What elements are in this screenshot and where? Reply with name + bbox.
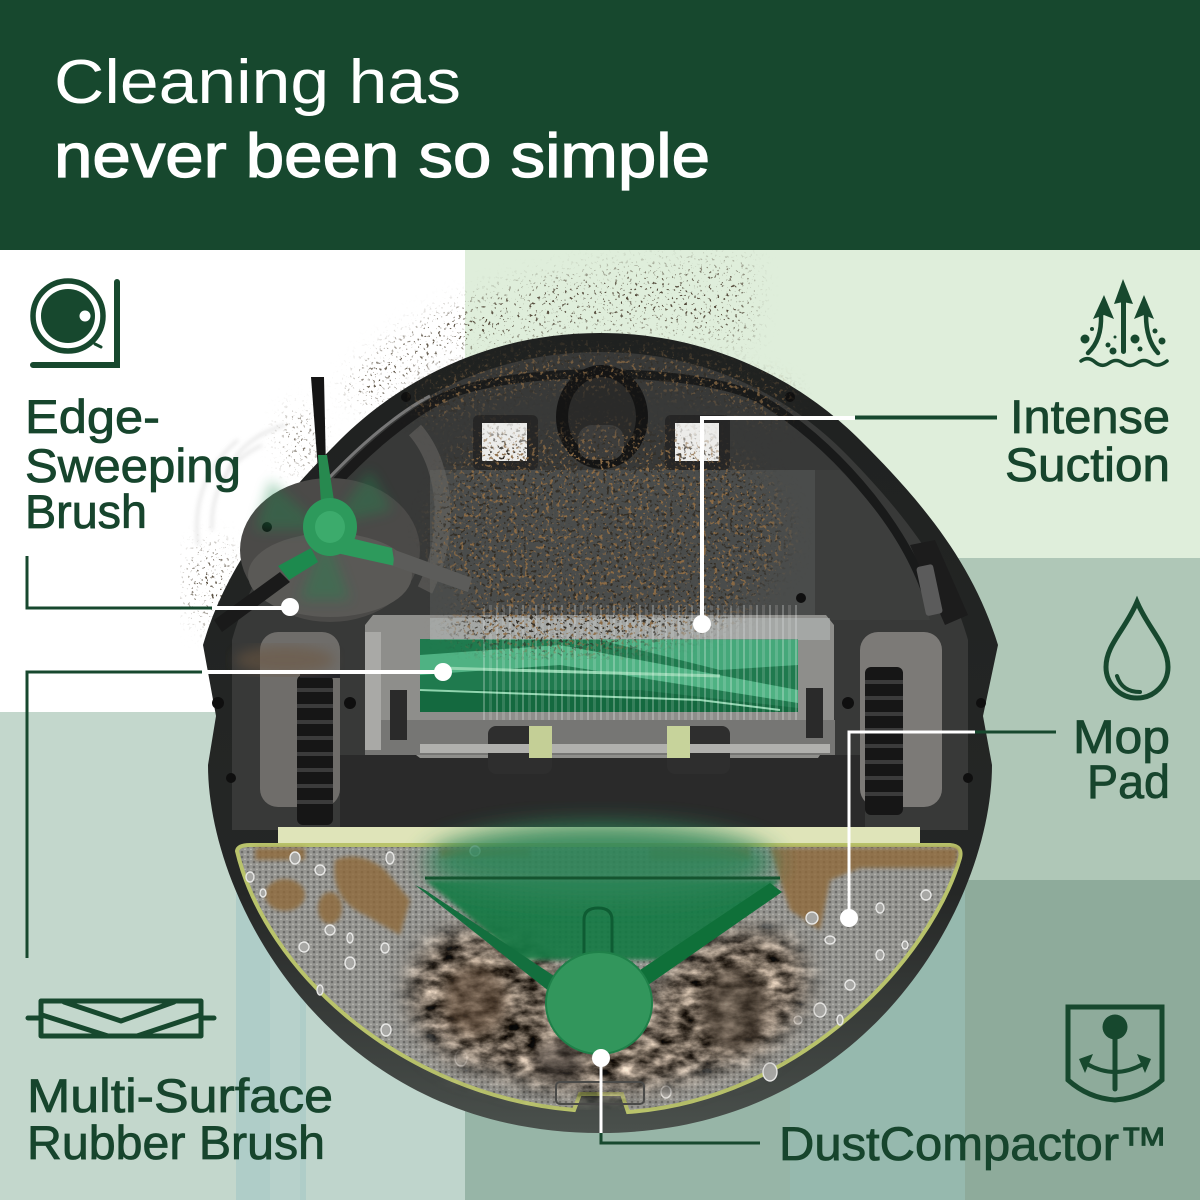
label: intense suction: Suction [1005,438,1170,491]
side brush well [240,430,443,622]
label: multi-surface rubber brush: Rubber Brush [27,1116,325,1169]
cliff sensor right [665,415,730,470]
label: intense suction: Intense [1010,390,1170,443]
right bump sensor [910,540,968,625]
robot vacuum [203,333,998,1133]
header band [0,0,1200,250]
dock slot [556,1082,644,1104]
label: intense suction [1005,390,1170,491]
side brush [214,377,472,632]
debris near left wheel [235,646,335,674]
green compactor haze [425,880,780,960]
mop pad [237,845,961,1112]
cavity [340,755,865,833]
floor panel [430,470,818,620]
right wheel well [860,632,942,815]
body inner panel [232,352,968,830]
label: edge-sweeping brush [25,390,241,538]
sweep motion arcs [197,425,285,545]
robot body shell [203,333,998,1133]
icon: anchor shield [1068,1007,1162,1100]
debris on the robot underside [400,340,820,660]
label: edge-sweeping brush: Brush [25,485,147,538]
inner ring edge [438,374,925,590]
icon: edge sweeping [33,281,117,365]
title: Cleaning has [54,48,461,117]
label: mop pad: Pad [1087,755,1170,808]
mop pad squeegee strip [278,827,920,848]
roller cage [365,615,835,774]
label: mop pad [1073,710,1170,808]
water droplets [246,846,931,1098]
callout: intense suction [693,418,997,633]
green roller brush [420,639,798,712]
caster wheel [556,365,648,469]
cliff sensor left [473,415,538,470]
title [54,48,710,191]
label: edge-sweeping brush: Edge- [25,390,160,443]
label: multi-surface rubber brush [27,1069,333,1169]
compactor arms and hub [415,883,782,1054]
icon: rubber roller [28,1001,214,1036]
label: dustcompactor: DustCompactor™ [779,1117,1168,1170]
debris flying outside the robot [180,250,780,650]
left wheel well [260,632,340,825]
callout: edge-sweeping brush [27,556,299,616]
suction streaks [430,605,830,720]
hair and dust clump [390,914,826,1109]
label: multi-surface rubber brush: Multi-Surface [27,1069,333,1122]
title: never been so simple [54,122,710,191]
icon: water drop [1106,602,1168,698]
label: edge-sweeping brush: Sweeping [25,439,241,492]
icon: suction arrows [1080,279,1167,366]
callout: dustcompactor [592,1049,760,1143]
roller clips [488,726,552,774]
callout: mop pad [840,732,1056,927]
callout: rubber brush [27,663,452,958]
small screws [212,392,986,783]
brown dirt on mop [255,848,958,935]
label: mop pad: Mop [1073,710,1170,763]
